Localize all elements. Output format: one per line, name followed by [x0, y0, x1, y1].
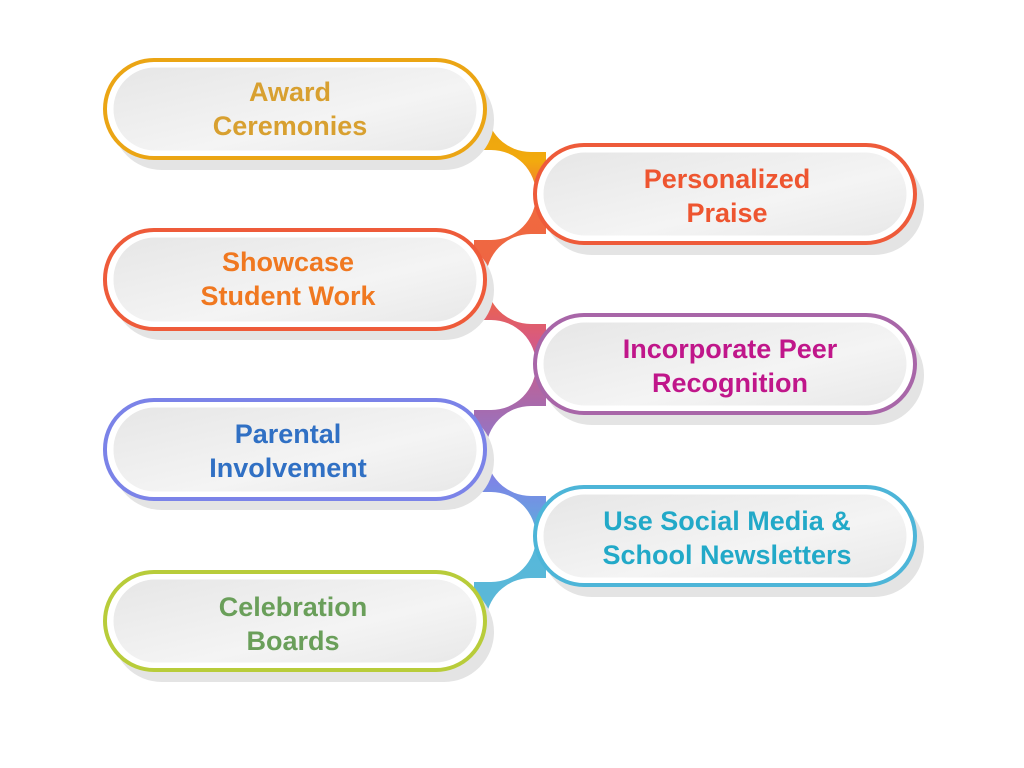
- pill: Parental Involvement: [105, 400, 494, 510]
- pill: Incorporate Peer Recognition: Recognition: [652, 368, 808, 398]
- pill: Showcase Student Work: Student Work: [200, 281, 376, 311]
- connector band: [300, 20, 786, 698]
- pill: Parental Involvement: Involvement: [209, 453, 367, 483]
- pill: Personalized Praise: Praise: [686, 198, 768, 228]
- pill: Celebration Boards: Boards: [246, 626, 340, 656]
- pill: Celebration Boards: [105, 572, 494, 682]
- pill: Parental Involvement: Parental: [235, 419, 341, 449]
- pill: Personalized Praise: [535, 145, 924, 255]
- pill: Incorporate Peer Recognition: Incorporate Peer: [623, 334, 838, 364]
- pill: Use Social Media & School Newsletters: Use Social Media &: [603, 506, 851, 536]
- pill: Showcase Student Work: Showcase: [222, 247, 354, 277]
- pill: Incorporate Peer Recognition: [535, 315, 924, 425]
- pill: Personalized Praise: Personalized: [644, 164, 810, 194]
- pill: Use Social Media & School Newsletters: [535, 487, 924, 597]
- pill: Showcase Student Work: [105, 230, 494, 340]
- pill: Award Ceremonies: Award: [249, 77, 331, 107]
- pill: Use Social Media & School Newsletters: School Newsletters: [602, 540, 852, 570]
- pill: Award Ceremonies: [105, 60, 494, 170]
- pill: Award Ceremonies: Ceremonies: [213, 111, 367, 141]
- pill: Celebration Boards: Celebration: [219, 592, 367, 622]
